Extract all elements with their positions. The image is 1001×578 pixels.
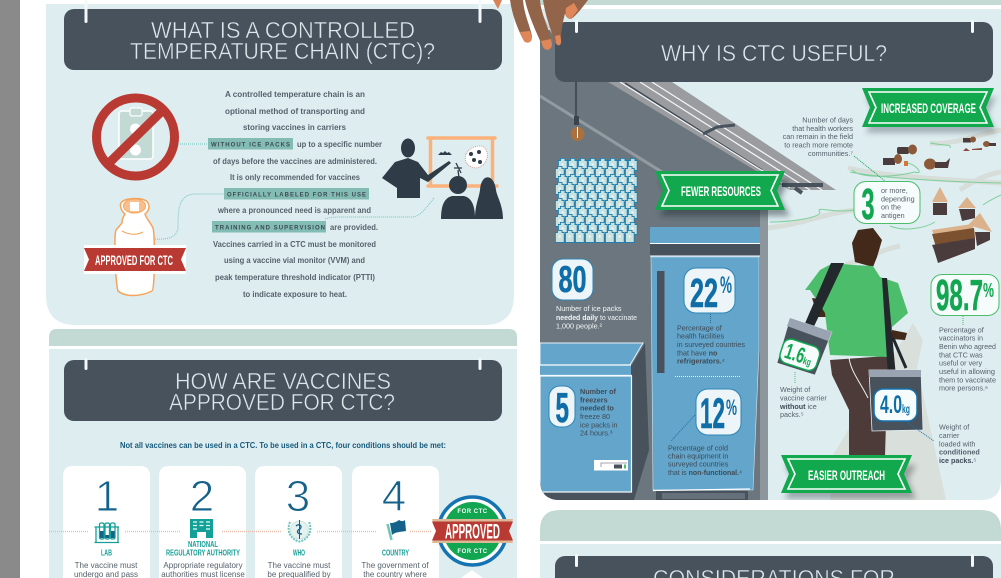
wall column [760,205,768,500]
stat: 5 freezers: freeze 80 [580,412,610,421]
roof [608,82,836,193]
card 1: lab: 1 [95,472,119,521]
stat: 98.7 percent: vaccinators in [939,334,983,342]
traveller [800,228,908,456]
stat: 98.7 percent: useful or very [939,358,983,368]
stat: 5 freezers: needed to [580,404,615,412]
icon: trainer and audience [382,138,503,219]
stat: 3 or more: 3 [862,180,874,229]
left carrier 1.6kg: kg [801,356,812,369]
heading: why is CTC useful: WHY IS CTC USEFUL? [661,40,887,66]
panel: why is CTC useful [540,9,1001,500]
card 4: country: 4 [382,472,406,521]
connector: 1.6kg to text [794,372,796,383]
stat: 3 or more: on the [881,202,901,212]
banner: easier outreach [781,455,916,499]
left carrier 1.6kg: 1.6 [782,338,808,368]
heading: how are vaccines approved [64,358,502,421]
body text: what is CTC: WITHOUT ICE PACKS [211,142,290,148]
text: weight without ice: vaccine carrier [780,394,827,402]
banner: increased coverage [862,88,996,133]
stat: 98.7 percent: them to vaccinate [939,376,996,384]
text: days in the field: Number of days [802,116,853,124]
stat: 5 freezers: 5 [556,384,569,431]
stat: 80 ice packs: needed daily to vaccinate [556,313,637,322]
text: weight without ice: packs.⁵ [780,410,804,419]
ice packs grid [555,158,637,242]
heading: what is a controlled temperature chain: WHAT IS A CONTROLLED [151,17,415,43]
panel: considerations [540,544,1001,578]
body text: what is CTC: TRAINING AND SUPERVISION [215,226,325,232]
connector: 4.0kg to text [908,423,934,441]
stat: 98.7 percent [931,271,999,392]
text: weight with conditioned ice: conditioned [939,448,980,456]
distant huts [883,136,996,170]
text: weight with conditioned ice: loaded with [939,440,975,448]
card 3: WHO: 3 [286,472,310,521]
connector: vial to label [155,194,224,239]
stat: 80 ice packs: Number of ice packs [556,304,622,313]
text: weight with conditioned ice: ice packs.⁵ [939,456,976,465]
section tab: approvals [49,329,517,346]
stat: 5 freezers [549,384,618,438]
heading: how are vaccines approved: APPROVED FOR CTC? [169,389,395,415]
stat: 12 percent: Percentage of cold [668,444,728,452]
panel: how are vaccines approved [49,349,517,578]
body text: what is CTC: using a vaccine vial monitor (VVM) and [224,256,365,265]
connector: training to trainer [325,198,434,219]
stat: 12 percent: 12 [700,390,725,438]
stat: 98.7 percent: % [983,280,994,302]
stat: 22 percent: Percentage of [677,324,722,332]
icon: vaccine vial with approved banner: APPROVED FOR CTC [95,252,173,268]
body text: what is CTC: to indicate exposure to heat. [243,290,347,299]
card 3: WHO: The vaccine must [268,561,331,570]
light bulb [570,82,584,141]
heading: what is a controlled temperature chain [64,0,502,70]
near huts [932,187,992,263]
stat: 5 freezers: Number of [580,387,617,396]
icon: no ice pack [96,98,174,176]
card 2: national regulatory authority: NATIONAL [188,540,218,549]
page margin strip [0,0,20,578]
freezer control [594,460,628,470]
stat: 3 or more: or more, [881,186,908,195]
icon: flag [388,520,406,540]
connector: days to badge [854,156,885,181]
house wall [540,30,780,500]
stat: 22 percent: that have no [677,348,718,358]
right carrier 4.0kg [869,370,923,431]
stat: 3 or more: depending [881,194,915,204]
approved seal: APPROVED [445,520,500,544]
road [767,130,1001,265]
card 1: lab: LAB [101,548,112,558]
stat: 3 or more: antigen [881,211,905,220]
stat: 80 ice packs [552,259,637,330]
stat: 22 percent: 22 [690,270,718,316]
section tab: why useful [540,0,1001,5]
card 2: national regulatory authority: Appropriate regulatory [163,561,243,570]
stat: 5 freezers: freezers [580,396,608,404]
stat: 3 or more [854,181,920,224]
text: days in the field: can remain in the field [783,132,853,141]
body text: what is CTC: where a pronounced need is apparent and [217,206,371,215]
text: days in the field: communities.⁷ [808,149,853,158]
icon: WHO emblem [289,520,310,542]
approved seal: FOR CTC [457,509,488,515]
stat: 98.7 percent: useful in allowing [939,367,995,376]
text: weight without ice: Weight of [780,385,810,394]
icon: vaccine vial with approved banner [84,198,186,296]
body text: what is CTC: storing vaccines in carriers [243,123,347,132]
body text: what is CTC: peak temperature threshold indicator (PTTI) [215,273,375,282]
heading: how are vaccines approved: HOW ARE VACCINES [175,368,391,394]
card 4: country [361,472,429,578]
heading: what is a controlled temperature chain: TEMPERATURE CHAIN (CTC)? [130,38,435,64]
card 2: national regulatory authority: 2 [190,472,214,521]
road shadow behind traveller [830,323,946,500]
right carrier 4.0kg: 4.0 [880,391,902,419]
body text: what is CTC: optional method of transporting and [225,107,365,116]
text: weight with conditioned ice [939,422,980,465]
fridge handle [657,271,664,373]
body text: what is CTC: are provided. [330,223,378,232]
card 4: country: The government of [361,561,429,570]
approved seal: FOR CTC [457,549,488,555]
stat: 12 percent: that is non-functional.⁴ [668,468,742,477]
card 1: lab [74,472,138,578]
body text: what is CTC: It is only recommended for vaccines [230,173,361,182]
stat: 12 percent [668,389,742,477]
stat: 98.7 percent: Benin who agreed [939,342,996,351]
left carrier 1.6kg [777,318,832,375]
dotted timeline [49,530,432,532]
stat: 12 percent: chain equipment in [668,452,728,460]
body text: what is CTC [208,90,382,299]
card 2: national regulatory authority: REGULATORY AUTHORITY [166,548,240,558]
approved seal [432,497,513,578]
condition cards [63,466,439,578]
banner: easier outreach: EASIER OUTREACH [808,467,885,483]
body text: what is CTC: OFFICIALLY LABELED FOR THIS USE [227,192,366,198]
refrigerator [650,227,760,500]
section tab: considerations [540,510,1001,541]
stat: 5 freezers: ice packs in [580,420,618,430]
stat: 22 percent: refrigerators.⁴ [677,356,725,366]
right carrier 4.0kg: kg [902,402,910,416]
wall highlight [540,96,662,172]
panel: what is a CTC [46,0,514,325]
banner: fewer resources [655,171,790,216]
body text: what is CTC: of days before the vaccines are administered. [213,157,377,166]
stat: 22 percent: % [720,272,732,299]
heading: considerations for [555,554,993,578]
walking path [770,143,1001,229]
text: days in the field [783,116,853,158]
stat: 98.7 percent: more persons.⁶ [939,384,988,392]
stat: 22 percent: health facilities [677,332,725,340]
stat: 80 ice packs: 80 [558,259,586,300]
text: weight without ice: without ice [779,402,817,411]
card 3: WHO: WHO [293,548,305,558]
freezer [540,343,649,500]
connector: no ice pack to text [178,143,207,145]
text: weight with conditioned ice: carrier [939,431,960,440]
text: weight with conditioned ice: Weight of [939,422,969,432]
card 1: lab: The vaccine must [75,561,138,570]
stat: 5 freezers: 24 hours.³ [580,428,613,438]
text: weight without ice [779,385,827,419]
icon: building [190,519,213,538]
stat: 98.7 percent: Percentage of [939,326,984,334]
icon: hand holding sign [493,0,588,50]
body text: what is CTC: up to a specific number [297,140,382,149]
icon: test tubes [94,523,119,542]
stat: 12 percent: surveyed countries [668,460,729,468]
banner: fewer resources: FEWER RESOURCES [681,183,761,199]
body text: what is CTC: Vaccines carried in a CTC must be monitored [213,240,376,249]
intro text: Not all vaccines can be used in a CTC. To be used in a CTC, four conditions should be met: [120,440,446,450]
heading: why is CTC useful [555,20,993,82]
stat: 12 percent: % [726,395,737,420]
card 4: country: COUNTRY [382,548,409,558]
stat: 80 ice packs: 1,000 people.² [556,322,603,330]
body text: what is CTC: A controlled temperature chain is an [225,90,365,99]
stat: 22 percent [677,268,745,366]
card 3: WHO [267,472,331,578]
stat: 98.7 percent: that CTC was [939,350,983,360]
text: days in the field: to reach more remote [784,140,853,150]
card 2: national regulatory authority [161,472,245,578]
stat: 22 percent: in surveyed countries [677,340,745,349]
text: days in the field: that health workers [792,124,853,133]
